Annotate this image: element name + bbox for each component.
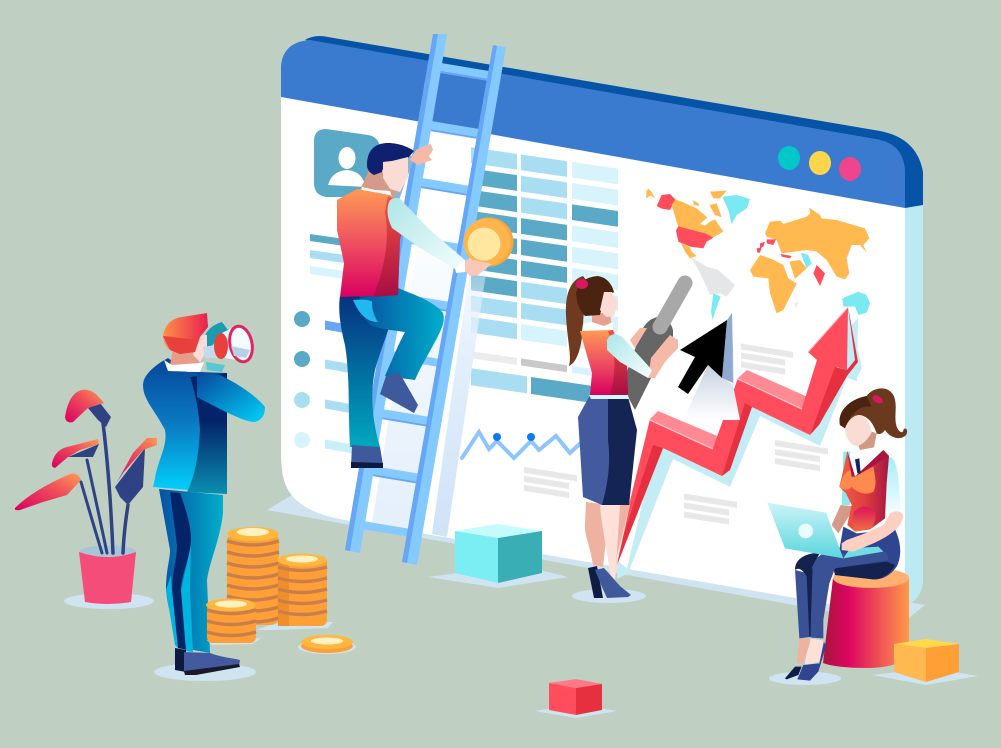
trouser cyan stripes xyxy=(166,545,193,652)
line chart xyxy=(462,432,584,458)
yellow block xyxy=(872,639,978,685)
hand with cuff xyxy=(455,259,492,276)
belt xyxy=(589,395,629,399)
pants front leg xyxy=(359,288,444,380)
front leg xyxy=(811,552,888,638)
window header bar xyxy=(281,40,905,208)
lower shoe xyxy=(351,445,383,467)
vest chest xyxy=(840,467,876,494)
center woman xyxy=(566,276,685,603)
forearm and hand xyxy=(842,511,903,552)
hands and forearm xyxy=(648,335,678,378)
bare back leg xyxy=(797,638,810,663)
hair xyxy=(840,388,907,438)
drum seat xyxy=(823,568,909,668)
neck xyxy=(360,168,400,196)
arrow highlight line xyxy=(650,307,848,449)
sleeve xyxy=(197,372,265,422)
neck xyxy=(170,345,200,365)
neck xyxy=(592,313,612,327)
face xyxy=(600,292,618,317)
arrow top highlight xyxy=(650,370,810,448)
window header depth xyxy=(305,36,923,208)
upper shoe xyxy=(380,372,418,413)
gray tool body xyxy=(625,317,673,410)
collar xyxy=(582,322,613,331)
back shoe xyxy=(785,667,802,679)
rising red arrow xyxy=(616,307,862,579)
browser window panel xyxy=(267,36,925,625)
window control dots xyxy=(778,146,861,181)
ladder window shadows xyxy=(372,200,495,537)
pot xyxy=(79,552,136,604)
megaphone man xyxy=(143,313,265,681)
stems xyxy=(81,423,128,553)
hair xyxy=(367,143,414,175)
back leg dark xyxy=(795,553,820,637)
skirt xyxy=(578,395,636,505)
shoes xyxy=(588,566,603,598)
front shoe xyxy=(797,642,826,681)
pants highlight xyxy=(353,300,378,322)
megaphone xyxy=(203,324,256,364)
vest neckline xyxy=(847,450,889,477)
front shoe xyxy=(184,652,240,675)
hair tie xyxy=(871,394,884,405)
profile avatar card xyxy=(314,129,380,197)
vest xyxy=(839,450,889,532)
window side band xyxy=(900,203,923,610)
face xyxy=(193,335,207,362)
collar xyxy=(164,360,204,372)
ponytail xyxy=(566,276,590,366)
hair xyxy=(163,313,208,354)
back leg xyxy=(795,570,813,638)
cyan block xyxy=(428,524,568,588)
arrow front xyxy=(616,307,848,565)
climbing man xyxy=(337,143,514,468)
pot shadow xyxy=(64,593,154,609)
stack B xyxy=(278,554,327,626)
hair tie xyxy=(576,279,588,289)
right rail xyxy=(402,45,506,565)
woman shadow xyxy=(572,589,646,603)
neck xyxy=(858,432,877,450)
vest xyxy=(337,189,408,297)
man shadow xyxy=(154,663,256,681)
under thigh xyxy=(833,562,895,579)
vest waist xyxy=(853,507,875,532)
black cursor xyxy=(678,313,740,420)
left rail xyxy=(345,34,447,553)
left arm xyxy=(832,505,852,533)
gray text lines xyxy=(524,309,828,540)
window white body xyxy=(281,90,905,617)
left sleeve xyxy=(842,452,850,505)
potted plant xyxy=(15,390,157,609)
face xyxy=(845,415,872,446)
leaf lower xyxy=(15,474,81,510)
gray tool handle xyxy=(660,283,685,327)
vest side xyxy=(373,196,408,297)
hips xyxy=(835,527,900,579)
legs xyxy=(585,502,610,567)
raised arm xyxy=(376,150,415,206)
pants xyxy=(159,489,223,653)
single coin xyxy=(301,635,353,653)
coin shadows xyxy=(207,622,333,645)
coin xyxy=(464,218,514,266)
vest xyxy=(580,330,628,395)
pants back leg xyxy=(339,294,398,447)
right sleeve xyxy=(880,457,901,514)
raised hand behind xyxy=(204,322,228,352)
back shoe xyxy=(175,648,186,672)
profile text lines xyxy=(310,234,355,280)
cursor fade shadow xyxy=(687,313,740,420)
leaf top xyxy=(88,403,111,427)
face xyxy=(383,157,408,192)
laptop xyxy=(767,503,883,558)
jacket xyxy=(143,358,227,493)
hair xyxy=(576,276,614,316)
ladder rungs xyxy=(356,62,495,538)
collar xyxy=(360,187,392,197)
hair dark part xyxy=(840,396,872,428)
arrow dark side xyxy=(616,307,858,565)
stack C xyxy=(206,598,256,643)
world map xyxy=(646,189,870,320)
stack A xyxy=(227,527,279,625)
sleeve xyxy=(607,334,652,378)
sleeve xyxy=(387,198,465,270)
data table xyxy=(471,147,618,407)
pot rim xyxy=(80,546,136,556)
raised hand xyxy=(410,144,433,165)
bullet list xyxy=(294,311,375,458)
leaf right xyxy=(115,448,145,505)
window floor shadow xyxy=(267,495,925,625)
bare front leg xyxy=(805,638,823,665)
trouser dark stripe xyxy=(170,492,191,650)
ladder xyxy=(345,34,506,565)
red block xyxy=(535,679,617,718)
seated woman with laptop xyxy=(767,388,907,685)
collar xyxy=(855,443,883,467)
leaf middle xyxy=(68,444,99,457)
arrow cyan shadow xyxy=(617,307,862,579)
shadow xyxy=(769,672,841,685)
coin stacks xyxy=(206,527,356,654)
